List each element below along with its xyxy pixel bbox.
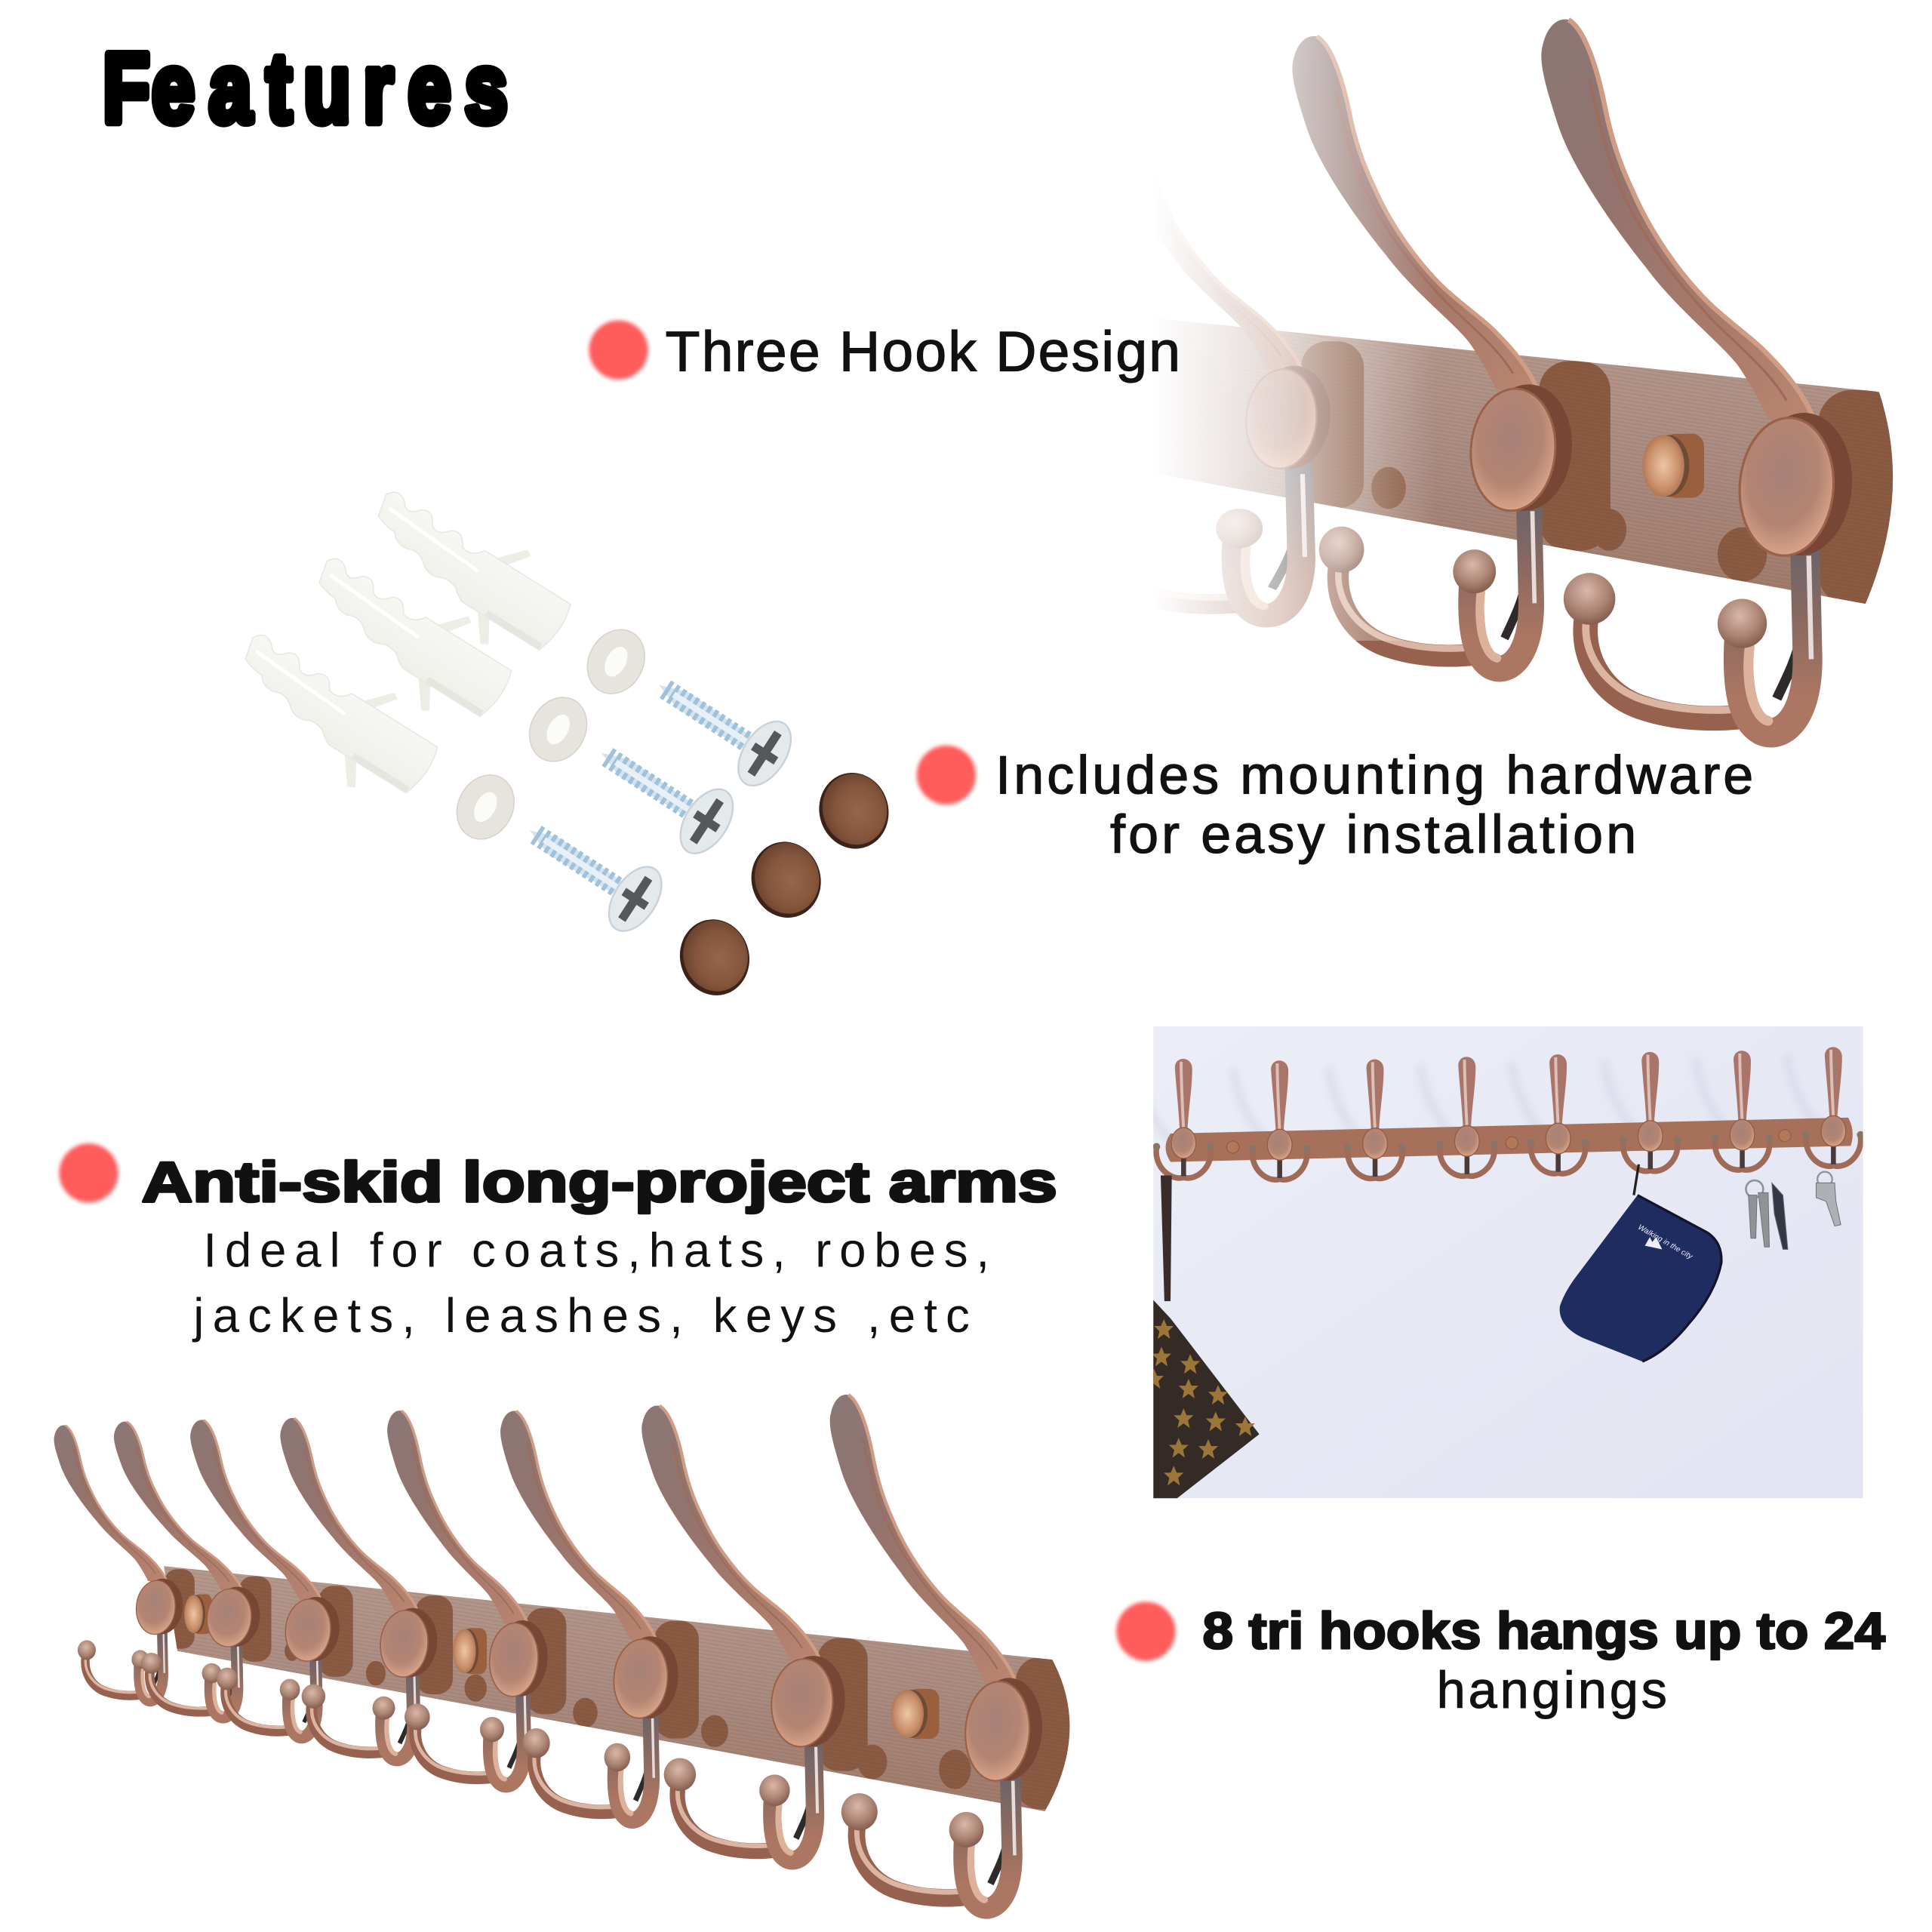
wall — [1153, 1026, 1863, 1498]
navy pouch: Walking in the city — [1636, 1223, 1694, 1261]
bullet: mounting hardware — [917, 746, 976, 804]
text: mounting hardware — [995, 745, 1753, 865]
eight hooks — [1153, 1047, 1864, 1180]
product image: eight hook rack — [54, 1395, 1073, 1909]
hook 7 — [641, 1405, 848, 1860]
middle hook — [1292, 36, 1577, 669]
text: 8 tri hooks — [1202, 1601, 1885, 1719]
rail — [1165, 1118, 1853, 1162]
text: anti-skid description: jackets, leashes, keys ,etc — [192, 1289, 970, 1343]
hook 1 — [54, 1425, 185, 1701]
rack plate — [1152, 318, 1900, 606]
hook 5 — [387, 1411, 550, 1785]
mounting pins — [184, 1594, 939, 1739]
text: mounting hardware: Includes mounting hardware — [995, 745, 1753, 805]
hook 3 — [190, 1420, 342, 1737]
mounting pin — [1642, 434, 1704, 498]
lifestyle photo panel — [1137, 1026, 1864, 1500]
wall anchors — [213, 471, 586, 818]
hook 8 — [830, 1395, 1045, 1909]
title: Features — [103, 32, 508, 143]
rack plate — [164, 1566, 1073, 1811]
product image: three hook rack close-up — [1060, 0, 1900, 733]
text: 8 tri hooks: 8 tri hooks hangs up to 24 — [1202, 1601, 1885, 1660]
hook 6 — [500, 1411, 681, 1820]
hook 2 — [114, 1422, 262, 1718]
mounting hardware set — [213, 471, 897, 1003]
bullet: three hook design — [589, 320, 648, 380]
keys — [1746, 1172, 1841, 1250]
text: three hook design: Three Hook Design — [666, 319, 1180, 383]
navy pouch — [1560, 1164, 1721, 1361]
washers — [446, 620, 656, 849]
white fade overlay — [1060, 0, 1438, 641]
text: anti-skid heading: Anti-skid long-project arms — [142, 1150, 1057, 1214]
hook 4 — [280, 1418, 439, 1759]
screws — [510, 655, 801, 940]
front hook — [1541, 20, 1857, 733]
hook shadows — [1153, 1060, 1814, 1140]
rail pins — [1226, 1130, 1791, 1153]
ghost hook — [1069, 82, 1334, 616]
screw caps — [672, 765, 897, 1003]
patterned wallet — [1144, 1176, 1260, 1500]
text: 8 tri hooks: hangings — [1437, 1661, 1667, 1719]
text: mounting hardware: for easy installation — [1110, 804, 1636, 865]
bullet: anti-skid — [59, 1143, 118, 1202]
text: anti-skid description: Ideal for coats,hats, robes, — [203, 1223, 989, 1277]
bullet: 8 tri hooks — [1116, 1601, 1176, 1661]
text: anti-skid description — [192, 1223, 989, 1343]
